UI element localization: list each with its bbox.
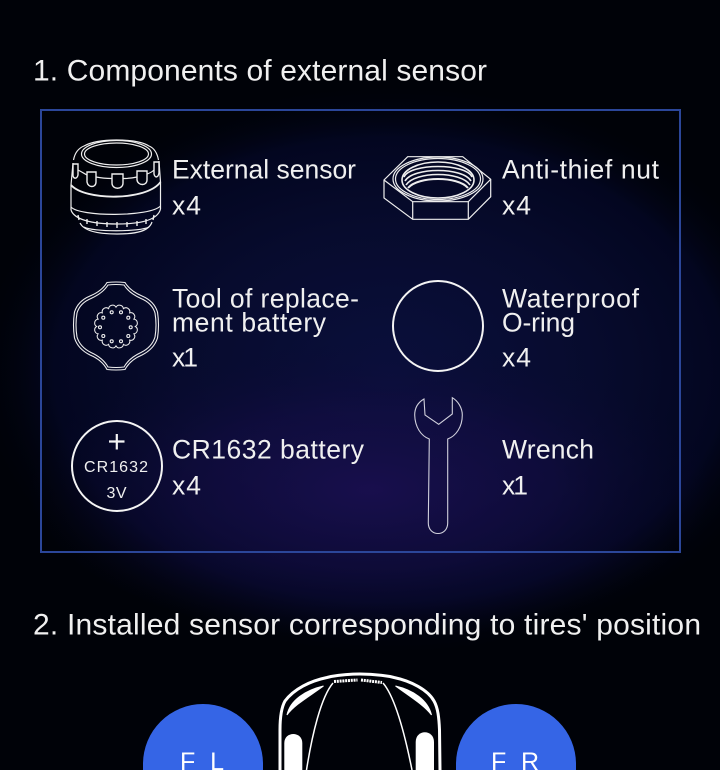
label: tool of replacement battery: ment battery xyxy=(172,308,327,338)
label: waterproof o-ring: Waterproof xyxy=(502,284,640,314)
label: tool of replacement battery xyxy=(172,284,359,338)
quantity: tool: x1 xyxy=(172,342,198,372)
icon: anti-thief nut xyxy=(384,157,491,219)
icon: CR1632 battery: 3V xyxy=(106,485,127,502)
heading: section 1: 1. Components of external sensor xyxy=(33,54,487,88)
car illustration xyxy=(280,674,440,770)
panel: components xyxy=(41,110,680,552)
icon: tool of replacement battery xyxy=(74,282,158,370)
quantity: battery: x4 xyxy=(172,470,201,500)
label: CR1632 battery: CR1632 battery xyxy=(172,434,365,464)
label: waterproof o-ring xyxy=(502,284,640,338)
icon: external sensor xyxy=(71,140,160,234)
icon: wrench xyxy=(415,398,462,534)
quantity: external sensor: x4 xyxy=(172,190,201,220)
badge: front left tire xyxy=(143,704,263,770)
quantity: wrench: x1 xyxy=(502,470,528,500)
icon: CR1632 battery xyxy=(72,421,162,511)
label: wrench: Wrench xyxy=(502,434,594,464)
quantity: anti-thief nut: x4 xyxy=(502,190,531,220)
label: waterproof o-ring: O-ring xyxy=(502,308,575,338)
label: anti-thief nut: Anti-thief nut xyxy=(502,154,660,184)
heading: section 2: 2. Installed sensor corresponding to tires' position xyxy=(33,608,701,642)
icon: waterproof o-ring xyxy=(393,281,483,371)
quantity: o-ring: x4 xyxy=(502,342,531,372)
label: tool of replacement battery: Tool of replace- xyxy=(172,284,359,314)
label: external sensor: External sensor xyxy=(172,154,356,184)
badge: front right tire xyxy=(456,704,576,770)
icon: CR1632 battery: CR1632 xyxy=(84,459,148,476)
